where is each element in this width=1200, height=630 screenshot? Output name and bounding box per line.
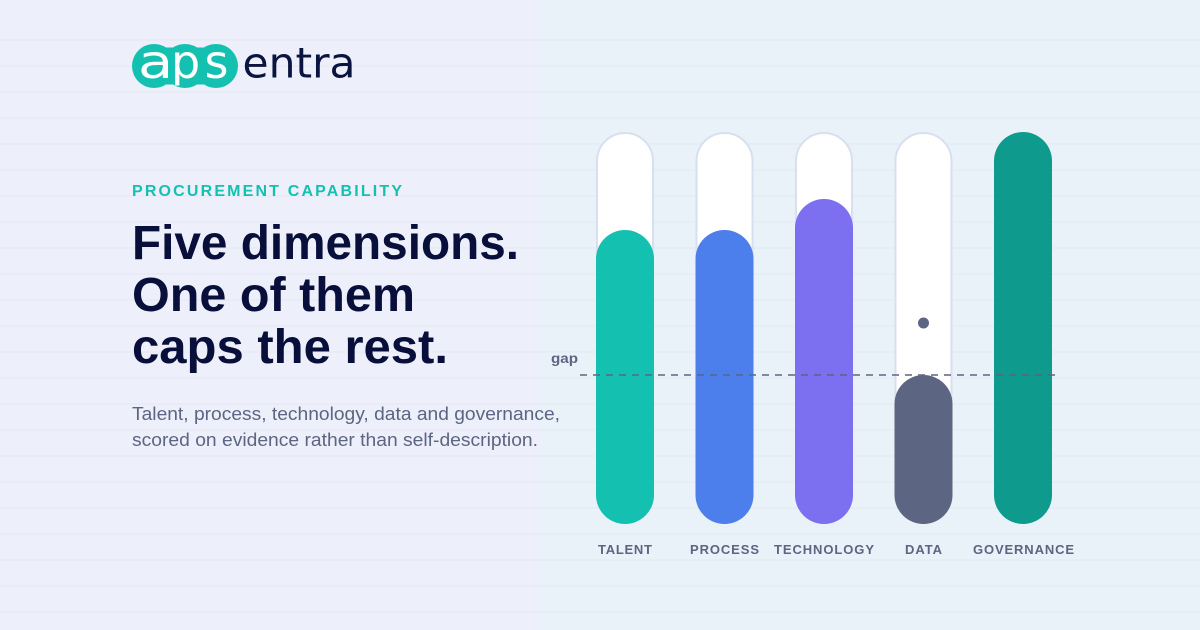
title: Five dimensions.: [132, 217, 519, 270]
description: scored on evidence rather than self-description.: [132, 430, 538, 450]
logo text: aps: p: [171, 35, 200, 89]
title: caps the rest.: [132, 321, 448, 374]
axis labels: [598, 542, 1074, 557]
description: Talent, process, technology, data and governance,: [132, 404, 560, 424]
axis labels: PROCESS: [690, 542, 759, 557]
axis labels: TALENT: [598, 542, 652, 557]
gap label: gap: [551, 350, 578, 366]
logo text: aps: s: [204, 35, 228, 89]
title: [132, 217, 519, 374]
axis labels: TECHNOLOGY: [774, 542, 874, 557]
logo: [132, 44, 352, 88]
axis labels: DATA: [905, 542, 943, 557]
bar: governance: [994, 132, 1052, 524]
eyebrow: PROCUREMENT CAPABILITY: [132, 183, 402, 200]
target dot: [918, 318, 929, 328]
bar: process: [696, 133, 754, 524]
logo text: aps: a: [138, 36, 173, 89]
logo text: entra: entra: [242, 38, 356, 88]
gap line: [580, 374, 1056, 376]
title: One of them: [132, 269, 415, 322]
bar chart: [551, 132, 1074, 557]
description: [132, 404, 560, 450]
axis labels: GOVERNANCE: [973, 542, 1074, 557]
bar: technology: [795, 133, 853, 524]
bar: talent: [596, 133, 654, 524]
logo text: aps: [141, 52, 226, 86]
logo badge: [132, 44, 238, 88]
bar: data: [894, 133, 952, 524]
